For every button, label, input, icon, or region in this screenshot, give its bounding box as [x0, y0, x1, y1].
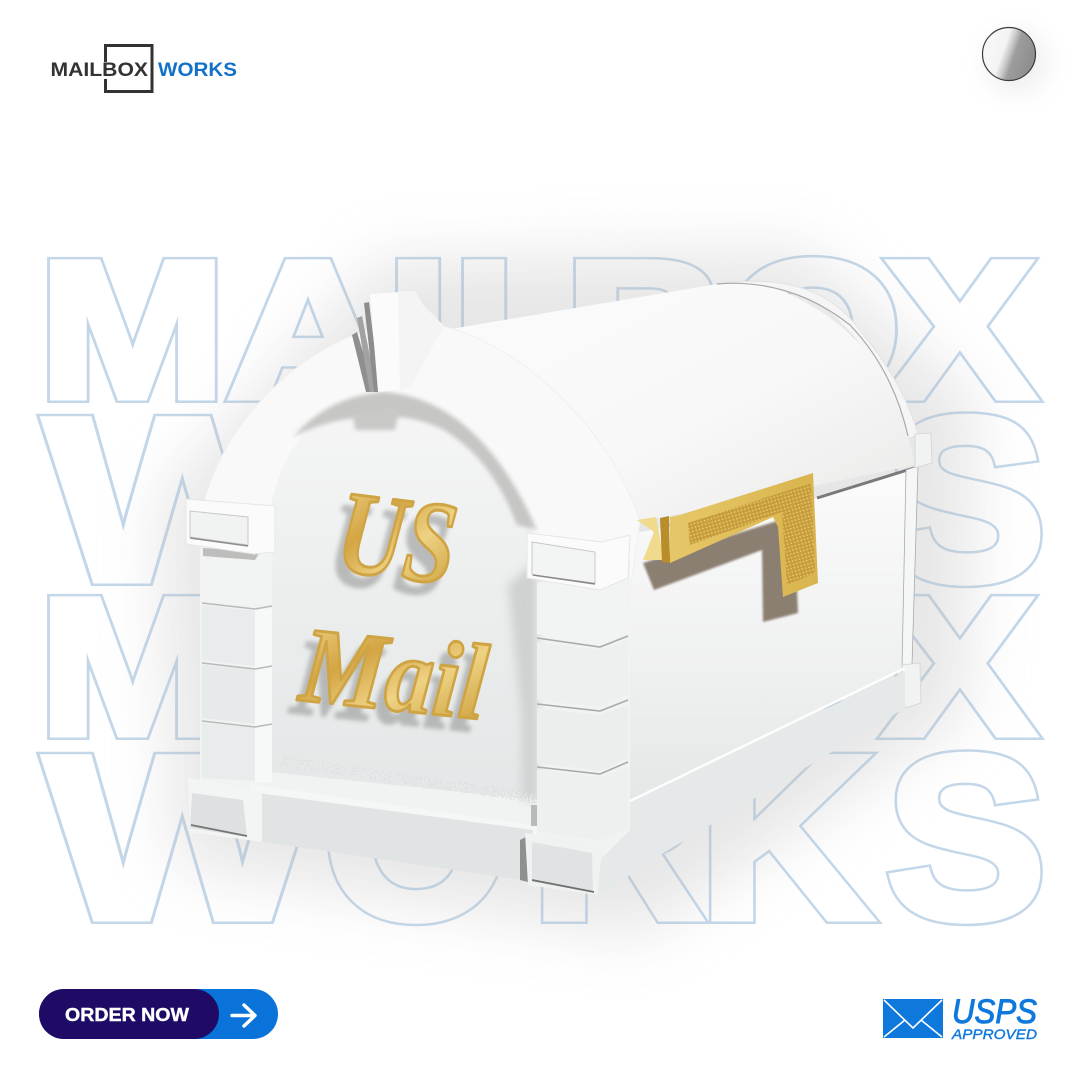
- right capital block: [527, 533, 630, 590]
- outline word: MAILBOX row 1: MAILBOX: [39, 221, 1035, 439]
- rear lower bracket: [902, 663, 921, 708]
- arch inner shadow: [293, 392, 537, 530]
- gold letters: Mail: Mail: [286, 617, 485, 755]
- button blue back: [39, 989, 278, 1039]
- rear edge strip: [902, 466, 918, 668]
- side panel: [625, 470, 906, 802]
- badge word: USPS: USPS: [952, 993, 1037, 1031]
- colour swatch: chrome finish: [982, 28, 1049, 94]
- keystone ornament: [352, 291, 444, 392]
- front face underlay: [200, 520, 630, 860]
- left pillar bricks: [202, 548, 272, 782]
- outline word: MAILBOX row 2: MAILBOX: [39, 558, 1035, 776]
- badge word: APPROVED: APPROVED: [951, 1026, 1037, 1042]
- left capital block: [186, 499, 275, 554]
- outline word: WORKS row 1: W: [45, 369, 323, 629]
- mailbox product illustration: [186, 281, 932, 895]
- usps approved badge: [883, 993, 1037, 1042]
- outline word: WORKS row 2: W: [45, 707, 323, 967]
- outline word: WORKS row 2: ORKS: [323, 708, 1046, 968]
- left base corner: [188, 778, 262, 842]
- right base corner: [525, 833, 603, 895]
- outline word: WORKS row 1: W: [45, 369, 323, 629]
- logo: Mailbox Works: [50, 46, 237, 92]
- mailbox soft drop shadow: [160, 250, 975, 935]
- button dark front: [39, 989, 219, 1039]
- rear upper bracket: [915, 433, 932, 468]
- right panel shadow: [508, 560, 537, 800]
- outline word: MAILBOX row 2: MAILBOX: [39, 558, 1035, 776]
- outline word: MAILBOX row 1: MAILBOX: [39, 221, 1035, 439]
- front base band: [250, 784, 537, 882]
- right pillar bricks: [537, 580, 628, 840]
- icon: arrow: [232, 1005, 255, 1026]
- icon: envelope: [883, 999, 943, 1038]
- gold letters: Mail: Mail: [294, 605, 493, 743]
- outline word: WORKS row 2: W: [45, 707, 323, 967]
- embossed approval text: APPROVED BY THE POSTMASTER GENERAL: [280, 754, 537, 806]
- seam under dome: [817, 468, 914, 498]
- side base band: [600, 672, 905, 895]
- gold side flag: [637, 473, 818, 597]
- order now button: [39, 989, 278, 1039]
- outline word: WORKS row 1: ORKS: [323, 370, 1046, 630]
- logo word: MAILBOX: MAILBOX: [50, 59, 148, 81]
- flag cast shadow: [643, 520, 798, 622]
- background outline wordmark: [39, 221, 1046, 968]
- button label: ORDER NOW: [65, 1004, 190, 1025]
- dome top: [445, 283, 915, 522]
- rear rim of dome: [715, 281, 918, 440]
- logo word: WORKS: WORKS: [158, 59, 237, 81]
- outline word: WORKS row 1: ORKS: [323, 370, 1046, 630]
- gold letters: US: US: [323, 478, 456, 622]
- outline word: WORKS row 2: ORKS: [323, 708, 1046, 968]
- gold letters: US: US: [331, 466, 464, 610]
- inner front panel: [270, 392, 537, 800]
- front arch: [202, 322, 640, 590]
- logo square: [106, 46, 152, 92]
